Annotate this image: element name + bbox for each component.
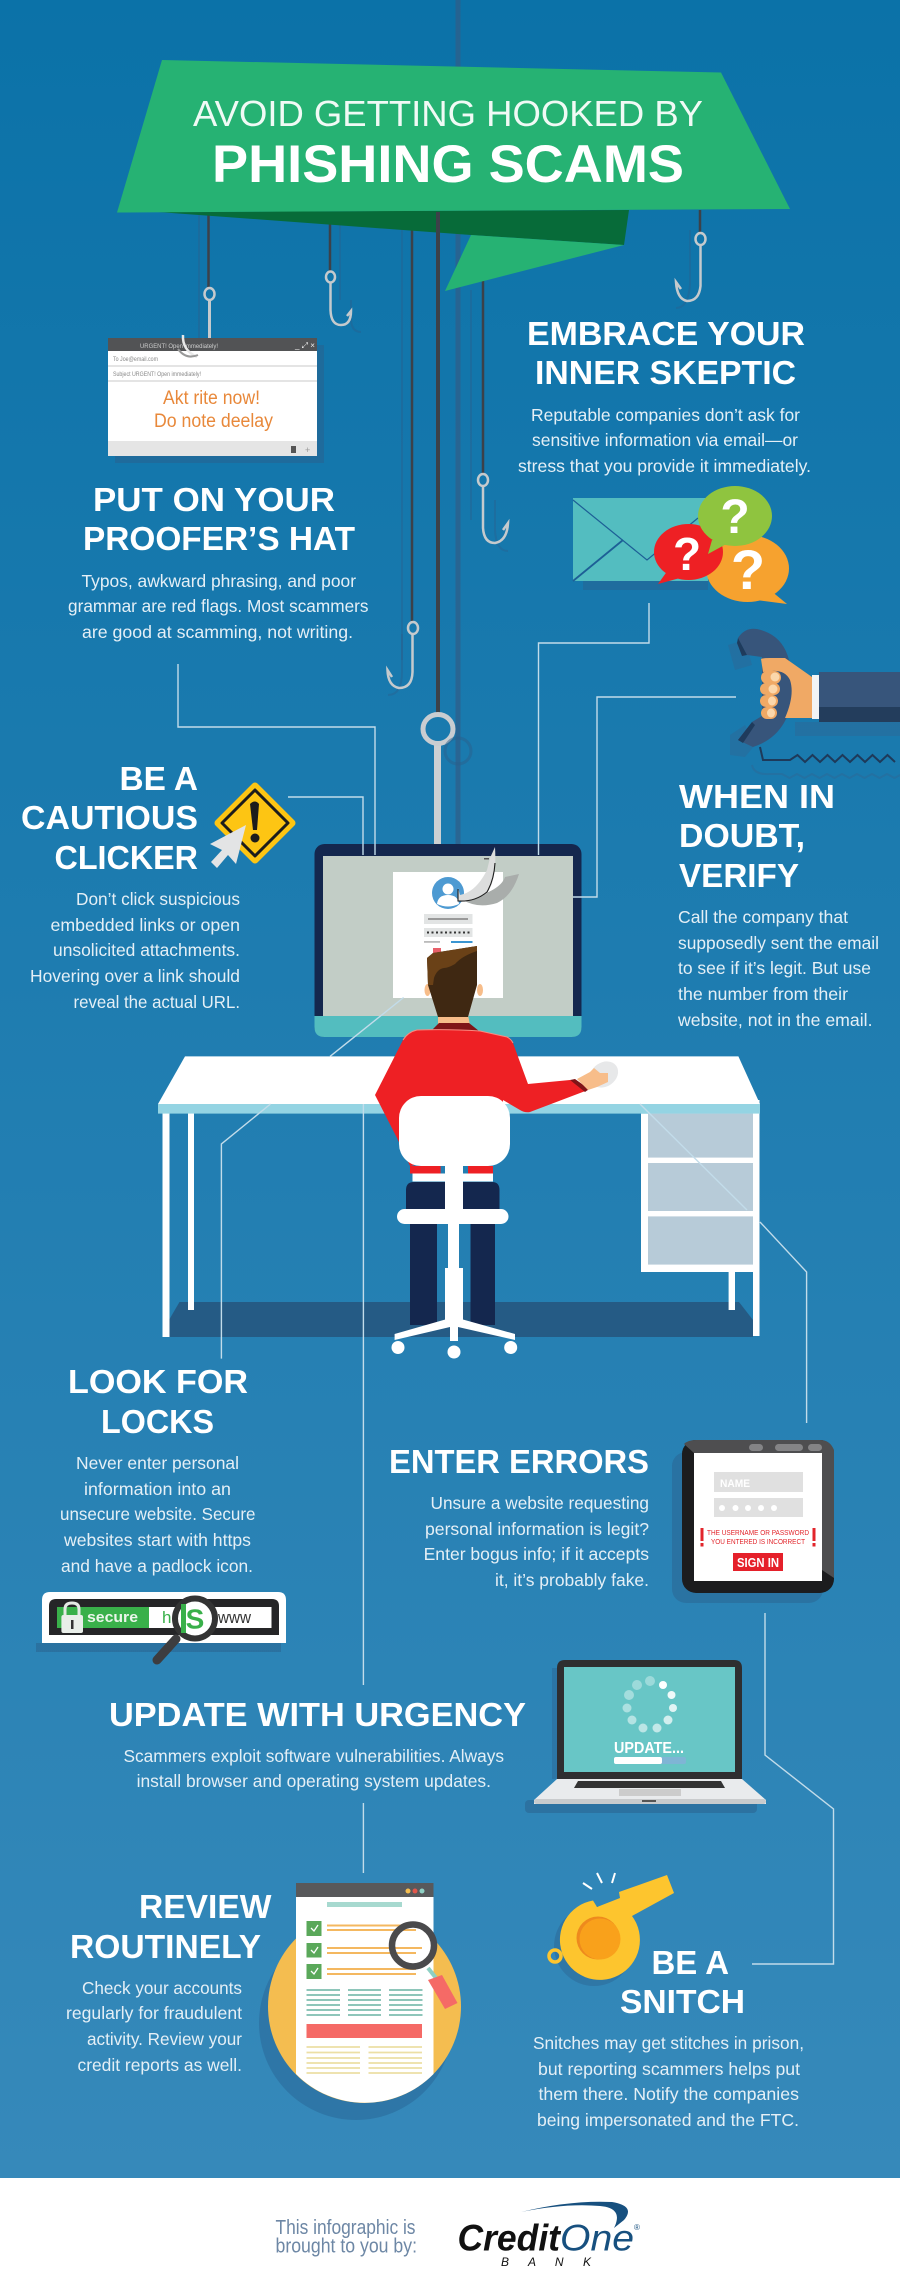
body text: them there. Notify the companies — [538, 2084, 799, 2104]
heading: EMBRACE YOUR — [527, 315, 805, 352]
email illustration: _ ⤢ × — [294, 341, 315, 350]
body text: Scammers exploit software vulnerabilities. Always — [124, 1746, 504, 1766]
heading: WHEN IN — [679, 778, 835, 815]
panel: cautious clicker — [21, 760, 292, 1012]
icon: tablet login error: SIGN IN — [737, 1555, 779, 1570]
email illustration: Do note deelay — [154, 411, 273, 432]
desk — [158, 1056, 760, 1337]
body text: install browser and operating system updates. — [137, 1771, 491, 1791]
heading: SNITCH — [620, 1983, 745, 2020]
body text: unsecure website. Secure — [60, 1504, 256, 1524]
panel: verify — [677, 629, 900, 1030]
body text: Check your accounts — [82, 1978, 242, 1998]
heading: PUT ON YOUR — [93, 481, 335, 518]
body text — [424, 1493, 649, 1590]
checkboxes — [306, 1921, 322, 1979]
hook: fifth — [676, 233, 706, 301]
body text: grammar are red flags. Most scammers — [68, 596, 369, 616]
body text: Snitches may get stitches in prison, — [533, 2033, 804, 2053]
body text: being impersonated and the FTC. — [537, 2110, 799, 2130]
body text: but reporting scammers helps put — [538, 2059, 800, 2079]
body text — [533, 2033, 804, 2130]
connector lines above the desk — [178, 603, 736, 1056]
email illustration: + — [305, 445, 310, 455]
panel: look for locks — [36, 1363, 286, 1660]
loading spinner — [622, 1676, 677, 1732]
icon: secure address bar — [36, 1592, 286, 1660]
Credit One Bank logo — [458, 2202, 640, 2269]
office chair — [392, 1096, 517, 1358]
icon: envelope and question bubbles — [573, 486, 789, 604]
body text: the number from their — [678, 984, 848, 1004]
body text: websites start with https — [63, 1530, 251, 1550]
body text — [68, 571, 369, 642]
body text: are good at scamming, not writing. — [82, 622, 353, 642]
icon: envelope and question bubbles: ? — [673, 528, 701, 580]
footer — [0, 2178, 900, 2293]
heading — [679, 778, 835, 894]
panel: enter errors — [389, 1440, 834, 1603]
heading: PROOFER’S HAT — [83, 520, 355, 557]
connector lines below the desk — [221, 1104, 833, 1964]
email illustration: To Joe@email.com — [113, 357, 158, 363]
body text — [60, 1453, 256, 1576]
heading: ENTER ERRORS — [389, 1443, 649, 1480]
body text: Hovering over a link should — [30, 966, 240, 986]
icon: warning sign and cursor — [210, 786, 292, 868]
body text: Unsure a website requesting — [430, 1493, 649, 1513]
body text: and have a padlock icon. — [61, 1556, 253, 1576]
heading: VERIFY — [679, 857, 799, 894]
body text: credit reports as well. — [78, 2055, 242, 2075]
hook in screen — [458, 847, 519, 905]
body text: personal information is legit? — [425, 1519, 649, 1539]
main hook ring and shank — [423, 714, 471, 846]
icon: whistle — [549, 1873, 674, 1986]
body text: website, not in the email. — [677, 1010, 872, 1030]
body text: it, it’s probably fake. — [495, 1570, 649, 1590]
icon: hand holding phone — [728, 629, 900, 778]
Credit One Bank logo: Credit — [458, 2218, 562, 2259]
icon: tablet login error: THE USERNAME OR PASSWORD — [707, 1528, 809, 1537]
heading — [527, 315, 805, 391]
Credit One Bank logo: B A N K — [501, 2255, 592, 2269]
body text: embedded links or open — [50, 915, 240, 935]
body text: stress that you provide it immediately. — [518, 456, 811, 476]
email illustration: Akt rite now! — [163, 388, 260, 409]
body text: Typos, awkward phrasing, and poor — [82, 571, 356, 591]
body text: Reputable companies don’t ask for — [531, 405, 800, 425]
icon: tablet login error: YOU ENTERED IS INCORRECT — [711, 1537, 805, 1546]
icon: envelope and question bubbles: ? — [731, 538, 765, 601]
email illustration: URGENT! Open immediately! — [140, 343, 218, 350]
hook: fourth — [478, 474, 508, 543]
collar — [431, 1023, 479, 1031]
heading: ROUTINELY — [70, 1928, 261, 1965]
shoulder highlight — [403, 1030, 513, 1043]
title line 1: AVOID GETTING HOOKED BY — [193, 93, 703, 134]
Credit One Bank logo: ® — [634, 2223, 640, 2232]
heading: CLICKER — [54, 839, 198, 876]
body text — [66, 1978, 242, 2075]
magnifier — [157, 1598, 215, 1660]
body text: information into an — [84, 1479, 231, 1499]
phishing login page — [393, 872, 503, 998]
hook: third — [388, 622, 418, 688]
heading — [620, 1944, 745, 2020]
magnifier — [392, 1924, 458, 2009]
panel: review routinely — [66, 1883, 461, 2120]
heading: REVIEW — [139, 1888, 272, 1925]
hook: second — [326, 272, 351, 325]
heading: CAUTIOUS — [21, 799, 198, 836]
icon: laptop updating — [525, 1660, 766, 1813]
panel: inner skeptic — [518, 315, 811, 604]
body text: sensitive information via email—or — [532, 430, 798, 450]
body text: Never enter personal — [76, 1453, 239, 1473]
body text: supposedly sent the email — [678, 933, 879, 953]
person at desk — [375, 946, 623, 1358]
body text: Don’t click suspicious — [76, 889, 240, 909]
body text — [124, 1746, 504, 1791]
body text: regularly for fraudulent — [66, 2003, 242, 2023]
heading: INNER SKEPTIC — [535, 354, 796, 391]
body text: reveal the actual URL. — [74, 992, 240, 1012]
hooks hanging from the banner — [199, 0, 706, 845]
heading: UPDATE WITH URGENCY — [109, 1696, 526, 1733]
heading: LOOK FOR — [68, 1363, 248, 1400]
body text: Call the company that — [678, 907, 848, 927]
email illustration — [108, 335, 324, 463]
icon: tablet login error — [672, 1440, 834, 1603]
trousers — [406, 1182, 500, 1325]
heading: DOUBT, — [679, 817, 805, 854]
icon: secure address bar: www — [217, 1608, 252, 1627]
computer monitor — [314, 844, 582, 1037]
body text — [30, 889, 240, 1012]
body text — [677, 907, 879, 1030]
panel: be a snitch — [533, 1873, 804, 2130]
icon: report under magnifier — [259, 1883, 461, 2120]
sponsor text: brought to you by: — [276, 2236, 417, 2258]
title line 2: PHISHING SCAMS — [212, 135, 684, 194]
hook: email — [204, 288, 214, 340]
heading — [68, 1363, 248, 1440]
email illustration: Subject URGENT! Open immediately! — [113, 372, 201, 378]
title banner — [117, 60, 790, 713]
heading — [70, 1888, 272, 1965]
body text: to see if it’s legit. But use — [678, 958, 871, 978]
red shirt — [375, 1030, 588, 1166]
heading — [21, 760, 198, 876]
icon: laptop updating: UPDATE... — [614, 1740, 684, 1757]
heading: BE A — [120, 760, 198, 797]
panel: proofer's hat — [68, 335, 369, 642]
Credit One Bank logo: One — [560, 2218, 634, 2259]
panel: update with urgency — [109, 1660, 766, 1813]
icon: secure address bar: h — [162, 1608, 171, 1627]
icon: tablet login error: NAME — [720, 1478, 750, 1490]
body text: unsolicited attachments. — [53, 940, 240, 960]
mouse and hand — [577, 1056, 623, 1093]
sponsor text: This infographic is — [276, 2217, 416, 2239]
icon: envelope and question bubbles: ? — [720, 491, 750, 544]
body text — [518, 405, 811, 476]
body text: Enter bogus info; if it accepts — [424, 1544, 649, 1564]
heading: BE A — [652, 1944, 729, 1981]
heading: LOCKS — [101, 1403, 214, 1440]
sponsor text — [276, 2217, 417, 2258]
cuff — [570, 1079, 589, 1092]
padlock — [61, 1603, 83, 1633]
body text: activity. Review your — [87, 2029, 242, 2049]
heading — [83, 481, 355, 557]
head and hair — [424, 946, 483, 1025]
icon: secure address bar: secure — [87, 1609, 138, 1626]
magnifier: S — [186, 1604, 204, 1634]
lower shirt — [410, 1166, 493, 1174]
